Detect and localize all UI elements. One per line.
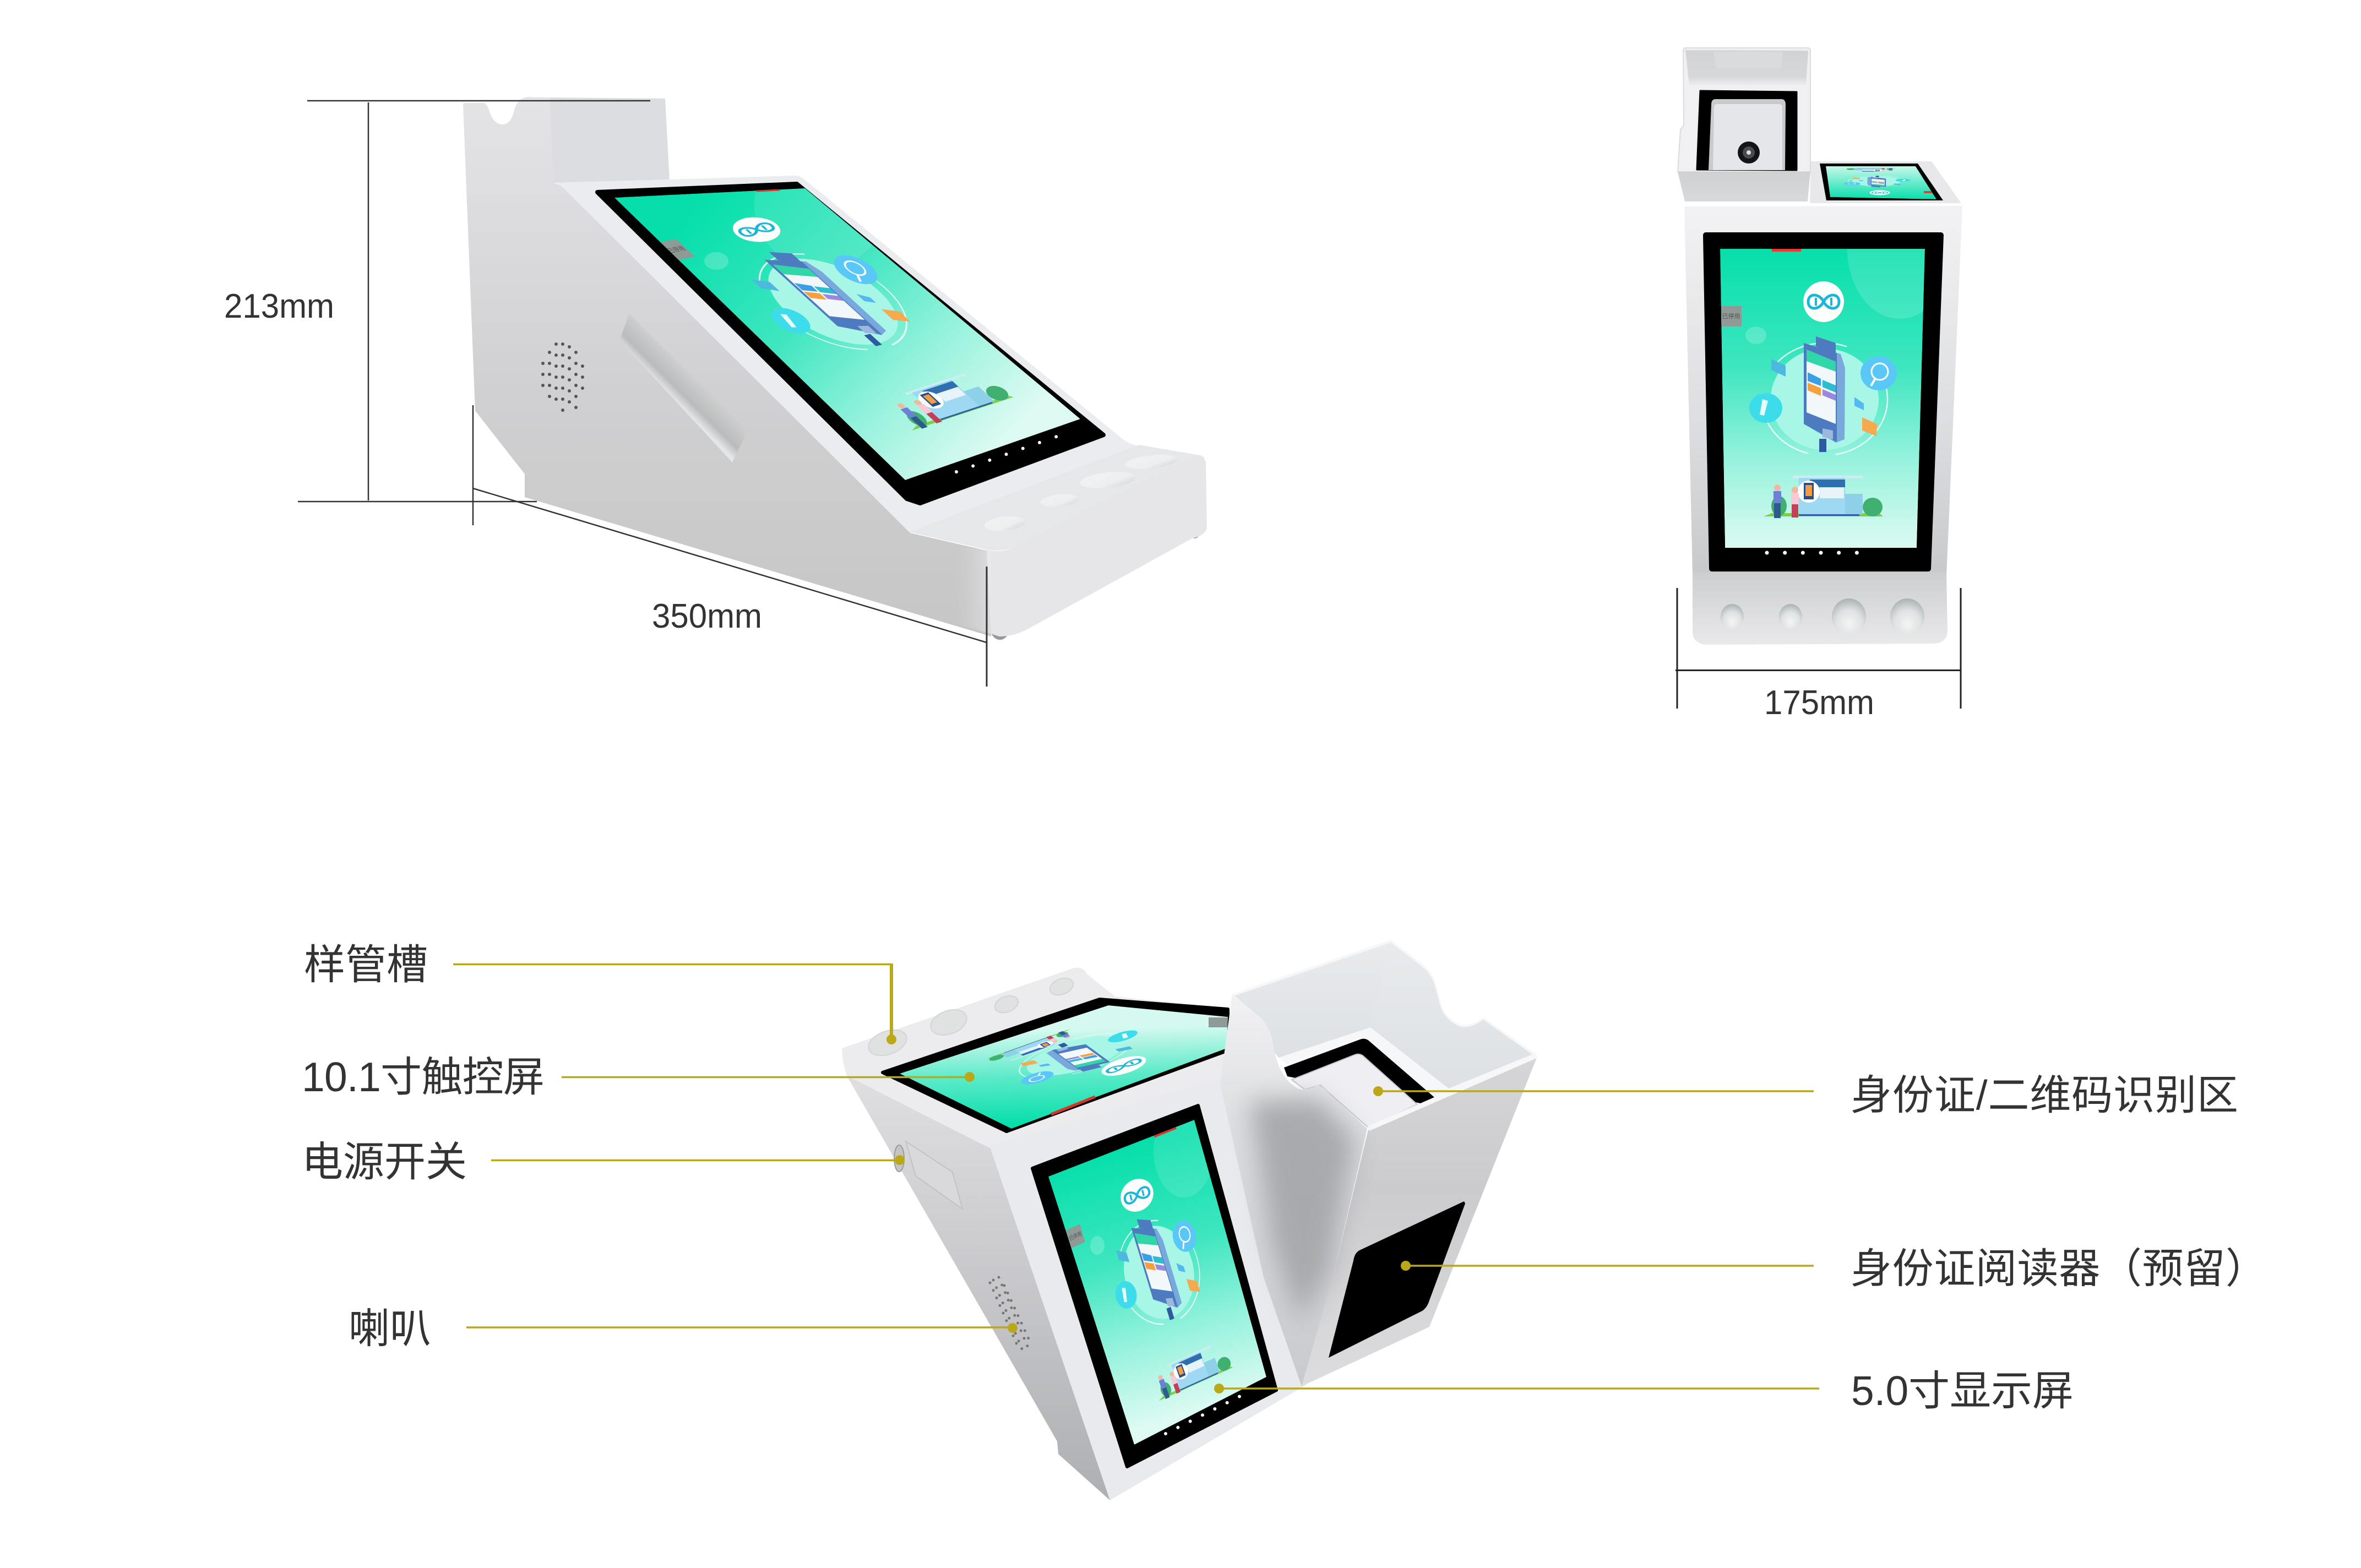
power switch [894,1145,904,1172]
scanner housing front wall [1302,1058,1537,1386]
scanner housing top block [550,97,670,183]
main body [1684,206,1962,577]
red status mark [757,190,780,191]
screen display [1720,249,1925,548]
base top surface [909,445,1204,551]
front face [989,1077,1307,1500]
screen display [614,188,1080,480]
dimension: 213mm: 213mm [224,287,334,325]
scanner housing curved left wing [1220,994,1367,1386]
on-screen nav keys [956,437,1057,472]
label: ID and QR code area: 身份证/二维码识别区 [1851,1072,2238,1118]
screen display: 已停用 [665,244,688,254]
base front face [991,456,1207,636]
5 inch screen bezel, top view [1820,164,1943,200]
screen display: 已停用 [1722,312,1740,320]
holes [1721,598,1924,635]
sample tube holes [865,975,1075,1060]
10.1 inch screen bezel on top [883,999,1228,1131]
label: 5.0 inch display: 5.0寸显示屏 [1851,1368,2074,1414]
callout dots [886,1035,1411,1393]
sloped bezel [553,176,1139,533]
on-screen nav keys [1767,551,1875,555]
sample tube holes [983,452,1179,533]
panel: front view device with width dimension [1675,48,1962,722]
small display [1826,166,1936,199]
left side face [847,1076,1110,1500]
top surface [842,968,1228,1148]
scanner housing [1678,48,1810,202]
base with tube holes [1693,573,1947,645]
rounded corner shading [953,546,999,636]
device feet [531,494,1200,640]
label: speaker: 喇叭 [349,1305,431,1352]
10.1 inch screen bezel [597,184,1103,503]
front display [1048,1104,1266,1445]
label: power switch: 电源开关 [302,1139,467,1185]
rear top surface [1810,161,1961,203]
device side face [463,97,991,636]
red status bar on top display [1051,1097,1095,1114]
wing shadow [1250,1098,1356,1321]
scanner housing rim and floor [1232,940,1537,1129]
scanner right wall [1370,943,1532,1088]
scanner lip highlight [1368,1055,1537,1129]
10.1 inch screen bezel [1706,235,1941,569]
scanner black frame [1284,1039,1434,1103]
ID reader panel [1329,1201,1465,1358]
panel: side view device with dimensions [224,97,1207,687]
dimension: 175mm: 175mm [1764,684,1874,722]
label: ID card reader reserved: 身份证阅读器（预留） [1851,1245,2267,1292]
on-screen nav keys [1166,1396,1240,1434]
callout leader lines [453,963,1819,1389]
top display [900,1005,1228,1129]
scanner window [1292,1054,1417,1128]
label: 10.1 inch touch screen: 10.1寸触控屏 [302,1054,545,1100]
scanner camera lens [1738,141,1760,164]
dimension lines [298,101,987,687]
label: sample tube slot: 样管槽 [304,941,428,988]
front display: 已停用 [1068,1230,1082,1242]
width dimension lines [1675,588,1961,709]
side recess slot [906,1141,962,1209]
speaker grille [990,1277,1031,1352]
scanner back wall [1234,943,1391,1058]
speaker grille [543,344,583,413]
side recess slot [619,314,747,462]
panel: annotated top view device [302,940,2267,1500]
5 inch screen bezel [1032,1106,1276,1467]
dimension: 350mm: 350mm [652,597,762,635]
